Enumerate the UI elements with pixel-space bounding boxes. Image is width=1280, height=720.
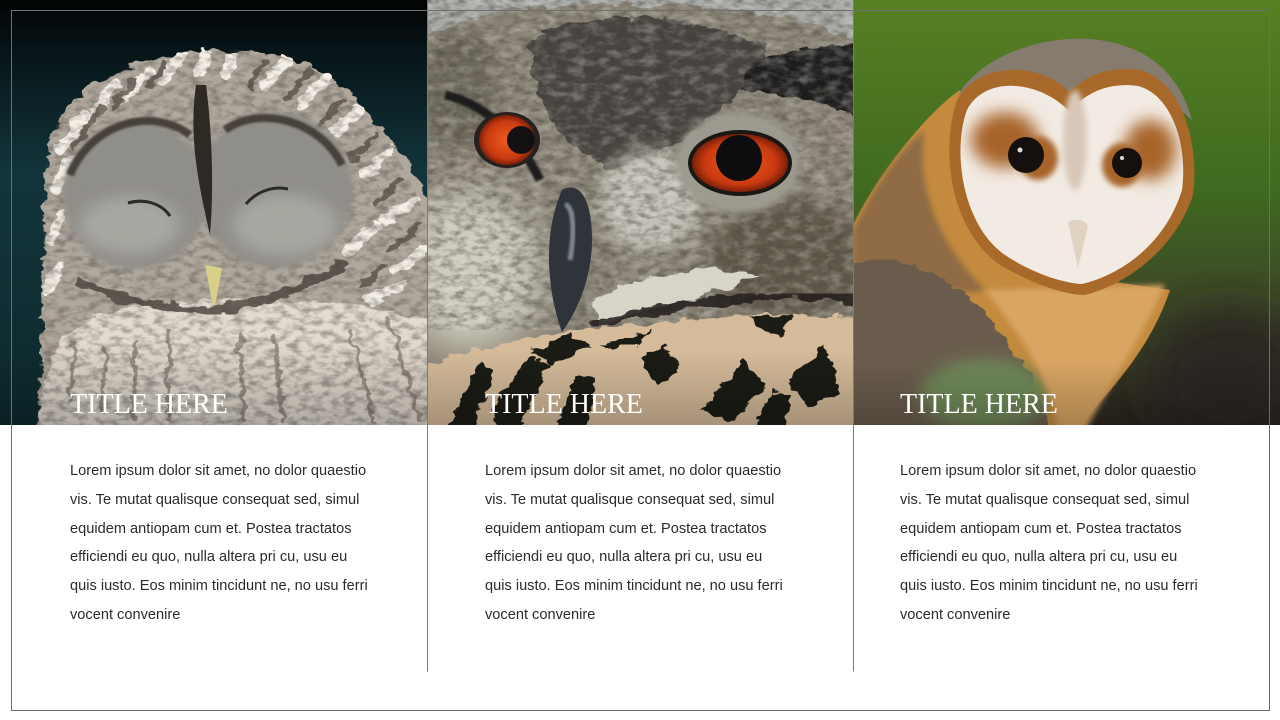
text block: column 3: vocent convenire: [900, 607, 1010, 623]
text block: column 3: efficiendi eu quo, nulla altera pri cu, usu eu: [900, 549, 1177, 565]
photo: sleeping grey owl: [0, 0, 427, 425]
white face: [960, 85, 1183, 284]
title: column 1: TITLE HERE: [70, 389, 228, 420]
lower buff feathers: [428, 312, 853, 425]
text block: column 2: quis iusto. Eos minim tincidunt ne, no usu ferri: [485, 578, 783, 594]
chin line: [75, 262, 345, 312]
breast: [985, 285, 1165, 440]
photo: barn owl: [854, 0, 1280, 425]
dark centre stripe: [193, 85, 212, 235]
right cheek: [710, 200, 870, 320]
rust around eyes: [971, 112, 1039, 168]
text block: column 3: [900, 463, 1198, 623]
dark forehead: [530, 18, 770, 170]
text block: column 3: Lorem ipsum dolor sit amet, no dolor quaestio: [900, 463, 1196, 479]
text block: column 2: [485, 463, 783, 623]
plumage grain: [36, 50, 427, 425]
beak: [205, 265, 222, 312]
eyes: [1008, 137, 1044, 173]
divider: right: [852, 0, 854, 672]
text block: column 2: Lorem ipsum dolor sit amet, no dolor quaestio: [485, 463, 781, 479]
text block: column 2: vocent convenire: [485, 607, 595, 623]
right eye: [676, 113, 800, 213]
text block: column 1: [70, 463, 368, 623]
text block: column 1: vocent convenire: [70, 607, 180, 623]
photo: eagle owl close-up: [428, 0, 853, 425]
beak: [1068, 220, 1088, 268]
text block: column 1: equidem antiopam cum et. Postea tractatos: [70, 521, 352, 537]
text block: column 3: quis iusto. Eos minim tincidunt ne, no usu ferri: [900, 578, 1198, 594]
chest feathers: [70, 320, 420, 420]
text block: column 3: equidem antiopam cum et. Postea tractatos: [900, 521, 1182, 537]
beak: [549, 187, 592, 332]
text block: column 2: equidem antiopam cum et. Postea tractatos: [485, 521, 766, 537]
title: column 3: TITLE HERE: [900, 389, 1058, 420]
closed eyes: [128, 201, 170, 216]
text block: column 1: Lorem ipsum dolor sit amet, no dolor quaestio: [70, 463, 366, 479]
text block: column 1: vis. Te mutat qualisque consequat sed, simul: [70, 492, 359, 508]
white chin: [590, 269, 760, 325]
golden body: [853, 90, 1170, 425]
heart face rim: [949, 69, 1194, 295]
plumage grain: [427, 0, 853, 330]
text block: column 2: vis. Te mutat qualisque consequat sed, simul: [485, 492, 774, 508]
grey wing: [854, 258, 1050, 425]
title: column 2: TITLE HERE: [485, 389, 643, 420]
owl body: [36, 46, 427, 425]
crown: [958, 39, 1192, 120]
text block: column 3: vis. Te mutat qualisque consequat sed, simul: [900, 492, 1189, 508]
divider: left: [426, 0, 428, 672]
left side grey feathers: [400, 190, 540, 350]
facial discs: [63, 121, 207, 269]
text block: column 2: efficiendi eu quo, nulla altera pri cu, usu eu: [485, 549, 762, 565]
left eye: [474, 112, 540, 168]
text block: column 1: efficiendi eu quo, nulla altera pri cu, usu eu: [70, 549, 347, 565]
text block: column 1: quis iusto. Eos minim tincidunt ne, no usu ferri: [70, 578, 368, 594]
